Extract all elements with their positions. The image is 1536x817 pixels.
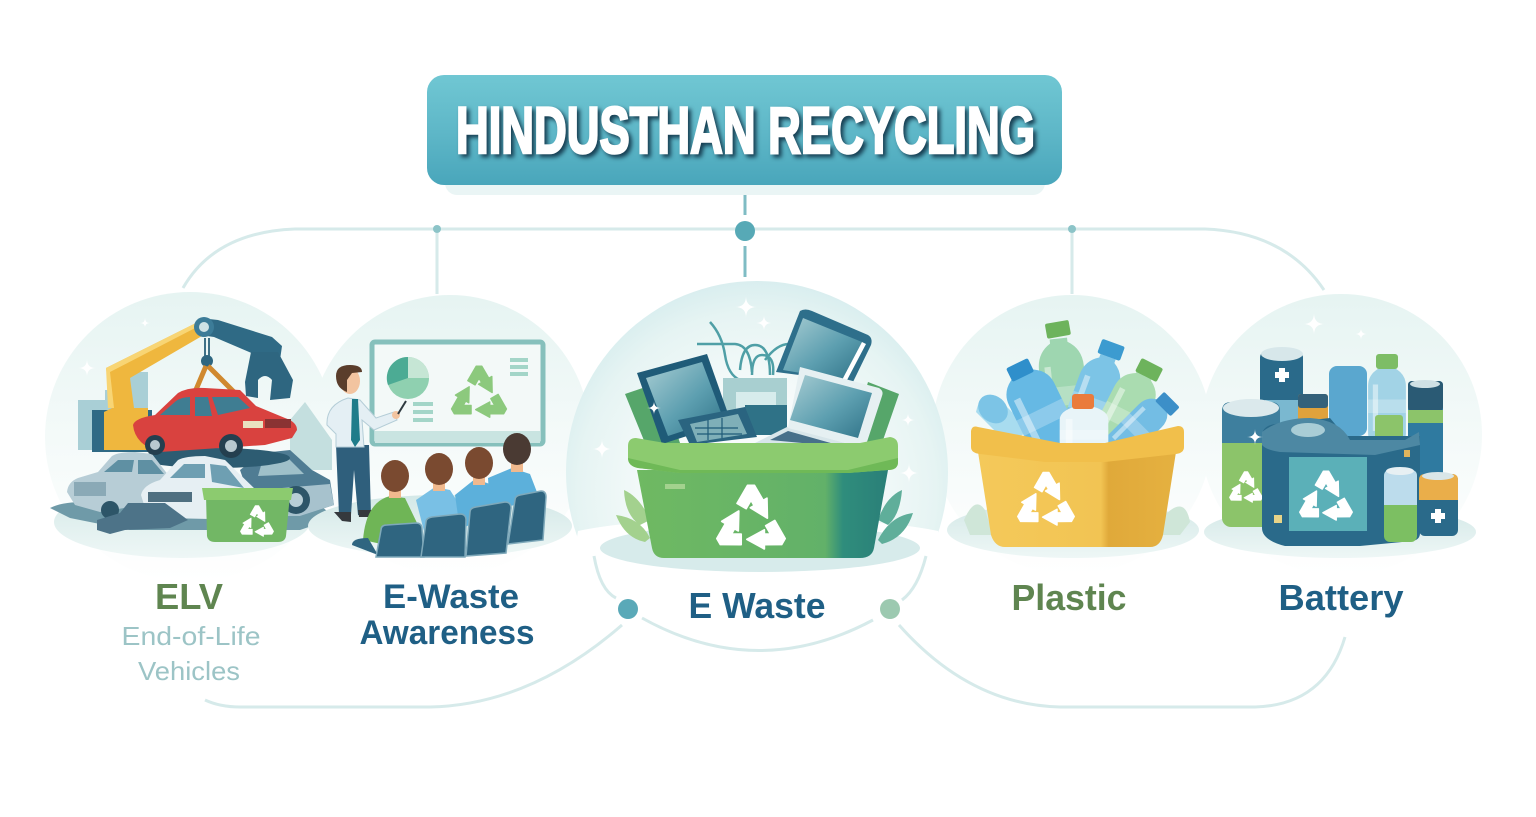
illustration: batteries (1204, 313, 1476, 558)
label: E-Waste Awareness (360, 578, 534, 652)
blue cylinder (1329, 366, 1367, 436)
illustration: e-waste bin (592, 296, 920, 572)
small white and green cell (1384, 467, 1417, 542)
green recycling bin (202, 488, 293, 542)
bottle cap (1376, 354, 1398, 369)
line two: Awareness (360, 614, 534, 652)
debris (97, 503, 188, 534)
dark shadow under red car (140, 448, 290, 468)
line one: E-Waste (383, 578, 519, 616)
label: ELV (122, 576, 260, 686)
label: Plastic: Plastic (1012, 577, 1126, 618)
leaves (616, 490, 650, 542)
bubble: e-waste (566, 281, 948, 663)
yellow bin rim (971, 426, 1184, 462)
connector node: center (735, 221, 755, 241)
bubble: ELV (45, 292, 335, 582)
presentation board (372, 342, 543, 444)
recycle symbol (710, 485, 790, 556)
ground (54, 486, 310, 558)
banner box (427, 75, 1062, 185)
middle car (141, 456, 256, 520)
yellow bin body (978, 452, 1176, 547)
title: HINDUSTHAN RECYCLING (456, 93, 1035, 167)
sparkles (140, 318, 150, 328)
crane (92, 317, 293, 452)
left big cell (1222, 399, 1280, 527)
ground (308, 495, 572, 557)
connector node: e-waste left (618, 599, 638, 619)
white base under e-waste bubble (552, 520, 962, 690)
ground (1204, 506, 1476, 558)
bubble: awareness (310, 295, 590, 575)
back dark cylinder (1260, 347, 1303, 430)
green bin rim (628, 437, 898, 473)
ELV subtitle line one: End-of-Life (122, 621, 260, 651)
small amber cell (1298, 394, 1328, 424)
connector node: e-waste right (880, 599, 900, 619)
laptop (747, 367, 883, 448)
connector lines (183, 229, 1345, 707)
red car (133, 388, 297, 458)
illustration: plastic bin (947, 320, 1199, 558)
monitor (637, 354, 731, 444)
translucent bottle (1368, 365, 1406, 440)
keypad device (678, 407, 757, 445)
tablet device (776, 310, 872, 382)
ground (947, 502, 1199, 558)
bottles (972, 320, 1180, 467)
connector node: right (1068, 225, 1076, 233)
ELV subtitle line two: Vehicles (138, 656, 240, 686)
recycle symbol (1012, 473, 1079, 531)
bubble: plastic (932, 295, 1212, 575)
leaves (964, 504, 993, 535)
dark ground shadow (50, 502, 335, 530)
middle box device (723, 378, 787, 420)
back car (240, 450, 334, 516)
amber and dark cell (1419, 472, 1458, 536)
center connector stem (744, 193, 746, 277)
audience (352, 433, 546, 557)
title banner (427, 75, 1062, 195)
sparkles (735, 296, 757, 318)
cables (697, 322, 795, 380)
sparkles (1303, 313, 1325, 335)
bin back flaps (625, 382, 680, 443)
tall right cell (1408, 380, 1443, 481)
illustration: ELV scrapyard (50, 317, 335, 558)
ELV heading: ELV (155, 576, 223, 617)
connector node: left (433, 225, 441, 233)
ground (600, 524, 920, 572)
central car battery (1262, 418, 1420, 546)
green bin body (637, 470, 888, 558)
illustration: e-waste awareness (308, 342, 572, 557)
label: E Waste: E Waste (688, 585, 826, 626)
small green cell (1375, 415, 1403, 445)
background buildings (78, 372, 148, 450)
left car (67, 452, 172, 519)
label: Battery: Battery (1278, 577, 1404, 618)
bubble: battery (1200, 294, 1482, 576)
banner shadow (445, 170, 1045, 195)
presenter (327, 365, 406, 522)
